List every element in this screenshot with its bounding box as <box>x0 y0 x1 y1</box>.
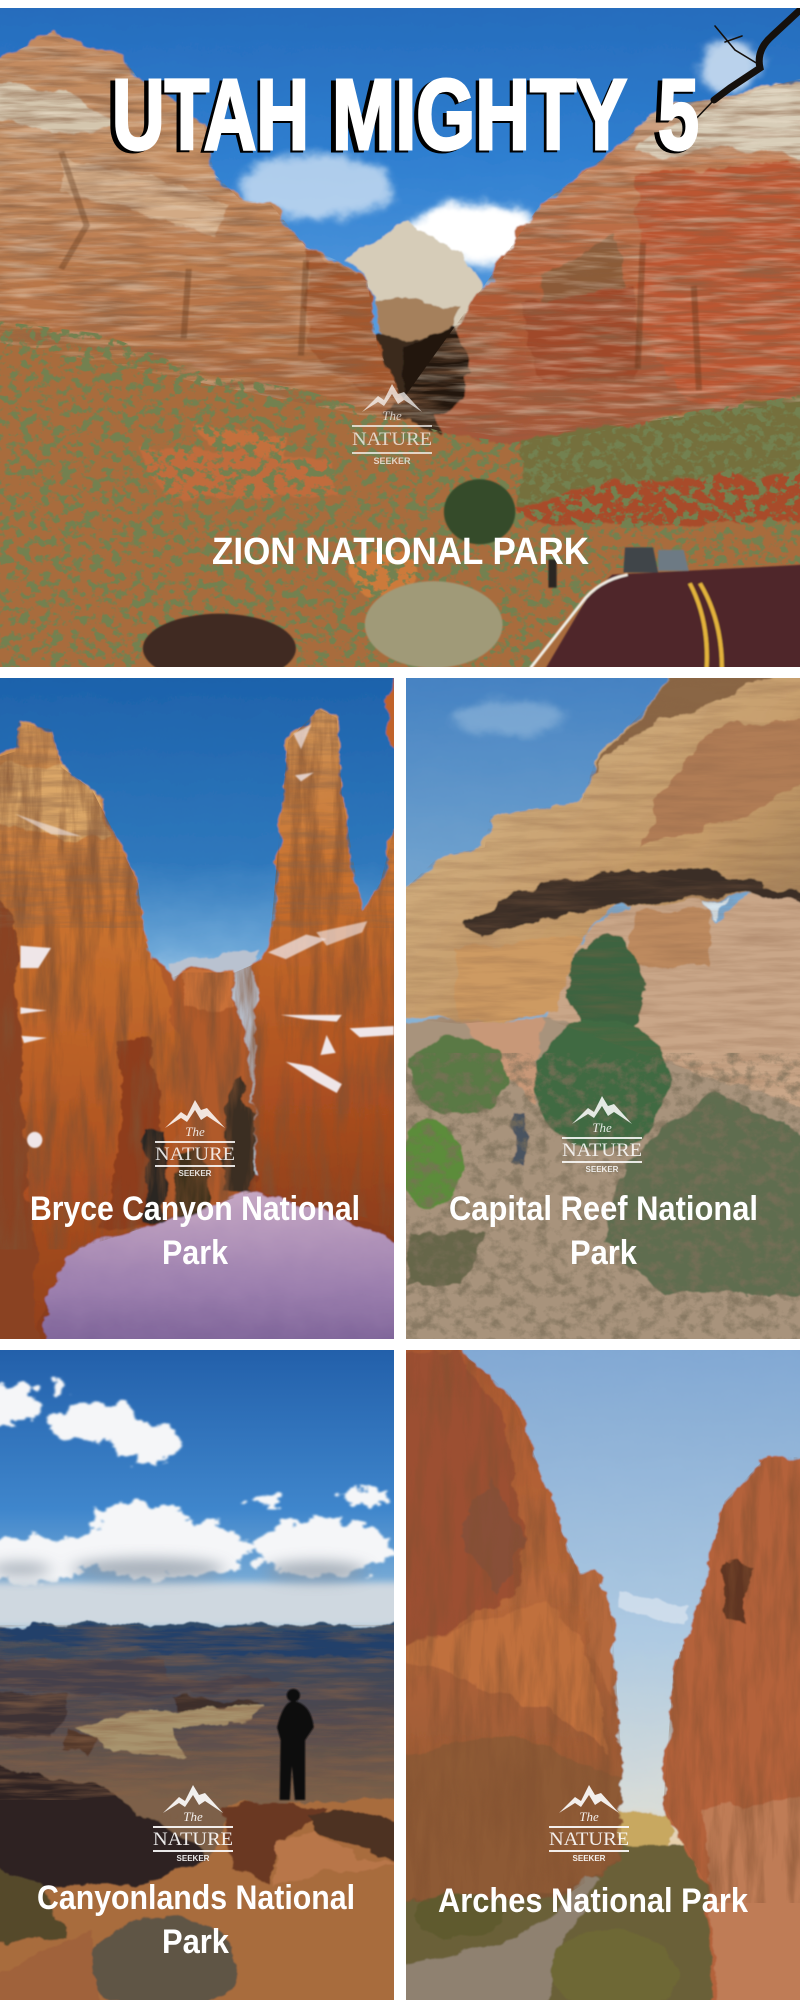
rock shadow cracks <box>61 152 699 390</box>
photo: Zion canyon scene <box>0 0 800 711</box>
snow patches <box>15 725 394 1148</box>
texture: scrub vegetation <box>0 321 800 667</box>
photo: Bryce Canyon hoodoos <box>0 678 394 1339</box>
label: Bryce Canyon National Park: Park <box>162 1234 228 1272</box>
logo: The Nature Seeker: NATURE <box>153 1829 233 1850</box>
logo: The Nature Seeker: SEEKER <box>586 1165 619 1174</box>
logo: The Nature Seeker: NATURE <box>155 1144 235 1165</box>
texture: strata <box>0 26 800 442</box>
title: 5 <box>658 59 699 171</box>
label: Bryce Canyon National Park <box>32 1195 358 1264</box>
logo: The Nature Seeker <box>153 1785 233 1863</box>
label: Arches National Park: Arches National Park <box>438 1882 748 1920</box>
title: UTAH <box>107 61 307 173</box>
panel: Zion National Park <box>0 0 800 711</box>
logo: The Nature Seeker: NATURE <box>549 1829 629 1850</box>
panel: Canyonlands National Park <box>0 1330 408 2000</box>
logo: The Nature Seeker: The <box>382 408 402 423</box>
panel: Capital Reef National Park <box>388 642 800 1383</box>
label: Bryce Canyon National Park: Bryce Canyon National <box>30 1190 360 1228</box>
texture: canyon land <box>0 1625 408 1800</box>
title: UTAH <box>112 59 309 171</box>
label: Canyonlands National Park: Park <box>162 1923 229 1961</box>
title: MIGHTY <box>332 59 627 171</box>
cloud shadows <box>0 1558 367 1582</box>
panel: Bryce Canyon National Park <box>0 678 394 1339</box>
label: Canyonlands National Park: Canyonlands National <box>37 1879 355 1917</box>
logo: The Nature Seeker: SEEKER <box>373 456 411 466</box>
logo: The Nature Seeker: NATURE <box>562 1140 642 1161</box>
logo: The Nature Seeker: The <box>592 1120 612 1135</box>
clouds <box>0 1378 393 1584</box>
texture: rock streaks <box>393 1330 800 1903</box>
label: Capital Reef National Park: Park <box>570 1234 637 1272</box>
logo: The Nature Seeker: The <box>185 1124 205 1139</box>
label: Zion National Park: ZION NATIONAL PARK <box>212 531 590 573</box>
panel: Arches National Park <box>393 1321 800 2000</box>
logo: The Nature Seeker: SEEKER <box>179 1169 212 1178</box>
logo: The Nature Seeker: NATURE <box>352 429 432 450</box>
logo: The Nature Seeker <box>352 384 432 466</box>
photo: Canyonlands overlook <box>0 1330 408 2000</box>
logo: The Nature Seeker <box>549 1785 629 1863</box>
person silhouette <box>277 1689 314 1800</box>
icon: black tree branch <box>697 8 800 118</box>
logo: The Nature Seeker <box>155 1100 235 1178</box>
logo: The Nature Seeker <box>562 1096 642 1174</box>
title: MIGHTY <box>327 61 625 173</box>
logo: The Nature Seeker: The <box>579 1809 599 1824</box>
title: 5 <box>653 61 697 173</box>
texture: hoodoo erosion <box>0 705 418 1249</box>
texture: shrubs and ground <box>406 1052 800 1339</box>
label: Capital Reef National Park: Capital Reef National <box>449 1190 758 1228</box>
photo: Arches rock fins <box>393 1321 800 2000</box>
texture: pale strata <box>0 26 800 442</box>
logo: The Nature Seeker: The <box>183 1809 203 1824</box>
label: Capital Reef National Park <box>450 1195 756 1264</box>
logo: The Nature Seeker: SEEKER <box>177 1854 210 1863</box>
label: Canyonlands National Park <box>37 1879 355 1961</box>
title <box>110 78 698 154</box>
logo: The Nature Seeker: SEEKER <box>573 1854 606 1863</box>
texture: hoodoo bands <box>0 705 418 928</box>
haze band <box>0 1582 408 1627</box>
photo: Capital Reef arch <box>406 678 800 1339</box>
texture: sandstone layers <box>406 681 800 1088</box>
